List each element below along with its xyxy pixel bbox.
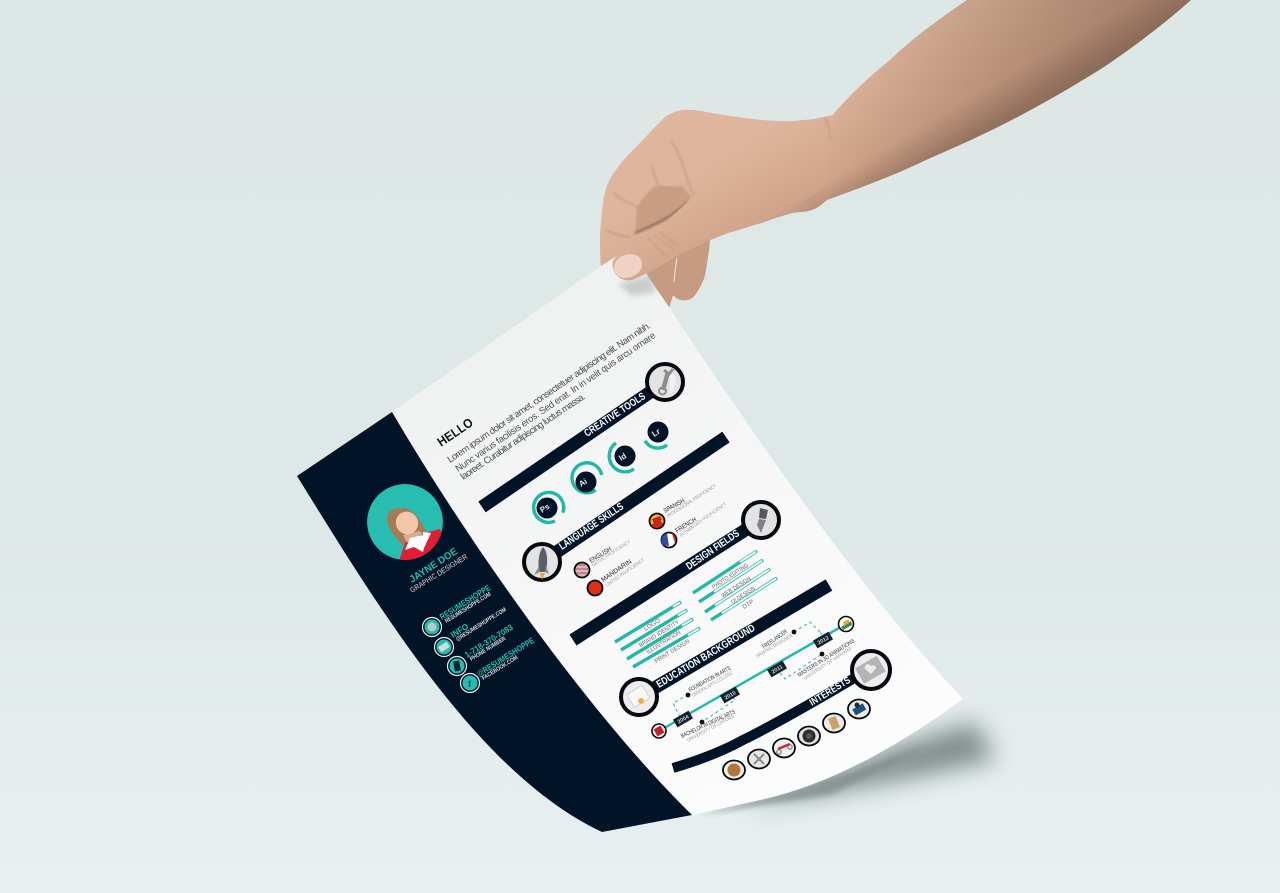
skill ring: illustrator: Ai [577,477,589,489]
section: language skills [524,437,728,596]
skill bar: logo: LOGO [643,618,662,633]
contact: facebook: FACEBOOK.COM [481,655,519,682]
icon: mail [434,638,454,656]
contact: website: RESUMESHOPPE [438,582,492,622]
section: creative tools [482,364,683,522]
job title: GRAPHIC DESIGNER [408,552,469,595]
skill bar: illustration [627,619,693,659]
entry: masters in 3d animations: UNIVERSITY OF HARVARD [803,646,853,682]
skill ring: illustrator [572,463,602,493]
entry: foundation in arts: GENERAL ARTS COLLEGE [691,670,734,699]
icon: rocket [524,544,560,580]
skill ring: photoshop: Ps [538,502,552,515]
intro paragraph: laoreet. Curabitur adipiscing luctus massa. [458,390,587,482]
entry: bachelor in digital arts: BACHELOR IN DIGITAL ARTS [680,709,736,740]
interest icon: bike [773,738,795,758]
avatar [367,484,443,560]
section: design fields [573,502,779,667]
header bar [482,382,665,507]
year tag: 2012 [813,632,833,648]
language: english: ENGLISH [588,546,613,565]
contact: mail: @RESUMESHOPPE.COM [455,607,508,643]
intro paragraph: Lorem ipsum dolor sit amet, consectetuer adipiscing elit. Nam nibh. [445,319,652,465]
heading: EDUCATION BACKGROUND [654,622,758,691]
year tag: 2010: 2010 [724,690,737,702]
timeline endpoint: start [652,724,666,738]
interest icon: basketball [723,760,745,780]
header bar [673,668,871,768]
icon: website [422,618,442,636]
skill bar: print design [633,628,700,667]
skill bar: ui design: UI DESIGN [731,586,757,606]
heading: CREATIVE TOOLS [582,390,648,440]
intro paragraph: Nunc varius facilisis eros. Sed erat. In in velit quis arcu ornare [453,329,657,474]
interest icon: tools [748,750,770,768]
curled finger shade [635,186,692,235]
language: spanish [650,483,718,528]
skill bar: logo [615,602,681,642]
language: spanish: SPANISH [663,497,686,515]
skill bar: web design [699,560,763,602]
skill ring: lightroom [645,422,668,448]
skill bar: print design: PRINT DESIGN [654,639,691,665]
year tag: 2011 [767,661,787,677]
year tag: 2010 [720,687,740,703]
thumb cast shadow [618,275,656,296]
entry: masters in 3d animations: MASTERS IN 3D ANIMATIONS [797,639,856,679]
interest icon: vinyl [798,726,820,746]
skill bar: dtp: DTP [742,599,755,611]
thumb knuckle creases [648,232,678,258]
sidebar profile [367,484,469,595]
interest icon: coffee [823,714,845,732]
contact: facebook: @RESUMESHOPPE [475,635,536,679]
skill bar: dtp [711,578,777,620]
language: mandarin: LIMITED PROFICIENCY [605,557,646,589]
year tag: 2012: 2012 [817,635,830,647]
skill bar: photo editing [693,551,757,593]
contact: phone: 1-718-370-7083 [463,622,515,660]
contact: facebook [475,635,539,683]
timeline endpoint: end [838,616,854,632]
header bar [542,437,726,562]
heading: LANGUAGE SKILLS [557,501,626,552]
icon: facebook: f [468,679,472,689]
contact: mail: INFO [449,621,470,640]
skill ring: indesign: Id [617,451,628,463]
thumbnail [610,250,646,282]
language: mandarin [588,557,646,596]
heading: hello: HELLO [434,415,476,449]
language: french [661,501,728,548]
thumb [610,177,740,282]
paper: white body [392,246,963,832]
creases [605,118,830,237]
timeline line [659,624,846,731]
skill ring: indesign [609,443,636,472]
header bar [573,520,761,640]
contact: website: RESUMESHOPPE.COM [444,592,492,625]
language: mandarin: MANDARIN [600,558,633,584]
skill ring: lightroom: Lr [650,427,662,439]
timeline connectors [673,622,825,722]
language: french: ELEMENTARY PROFICIENCY [679,501,728,539]
heading: INTERESTS [808,675,853,709]
entry: bachelor in digital arts: UNIVERSITY OF OXFORD [686,713,736,744]
contact list [422,582,539,692]
lower finger shade [647,240,710,308]
header bar [639,585,829,697]
heading: DESIGN FIELDS [684,527,742,572]
icon: phone [448,656,466,676]
shadow between thumb and finger [635,202,688,233]
year tag: 2011: 2011 [771,664,784,675]
icon: wrench [647,364,683,400]
paper sheet [297,246,963,832]
skill bar: ui design [705,569,770,612]
paper: dark sidebar [297,412,692,832]
skill bar: web design: WEB DESIGN [721,576,752,600]
entry: freelancer: FREELANCER [762,629,789,651]
icon: certificate [621,679,657,715]
interest icon: camera [848,700,870,718]
contact: phone: PHONE NUMBER [469,636,508,663]
section: interests [673,651,890,780]
arm and hand [600,0,1191,308]
skill bar: photo editing: PHOTO EDITING [711,563,750,591]
entry: freelancer: GRAPHIC DESIGNER [755,633,794,660]
language: english [574,539,632,578]
paper shadow [700,722,995,815]
icon: pen nib [743,502,779,538]
entry: foundation in arts: FOUNDATION IN ARTS [688,666,732,694]
language: english: NATIVE PROFICIENCY [591,539,632,569]
skill bar: brand identity [621,610,687,650]
year tag: 2004: 2004 [677,714,691,726]
timeline dots [686,630,824,724]
skill ring: photoshop [534,492,564,522]
icon: heart folder [852,651,890,689]
language: spanish: PROFESSIONAL PROFICIENCY [666,483,718,520]
finger gap [674,258,677,282]
skill bar: illustration: ILLUSTRATION [646,630,682,656]
section: education background [621,585,856,744]
language: french: FRENCH [674,516,698,535]
skill bar: brand identity: BRAND IDENTITY [638,620,681,649]
name: JAYNE DOE [408,546,460,586]
year tag: 2004 [673,711,693,727]
entry: foundation in arts [688,666,734,699]
